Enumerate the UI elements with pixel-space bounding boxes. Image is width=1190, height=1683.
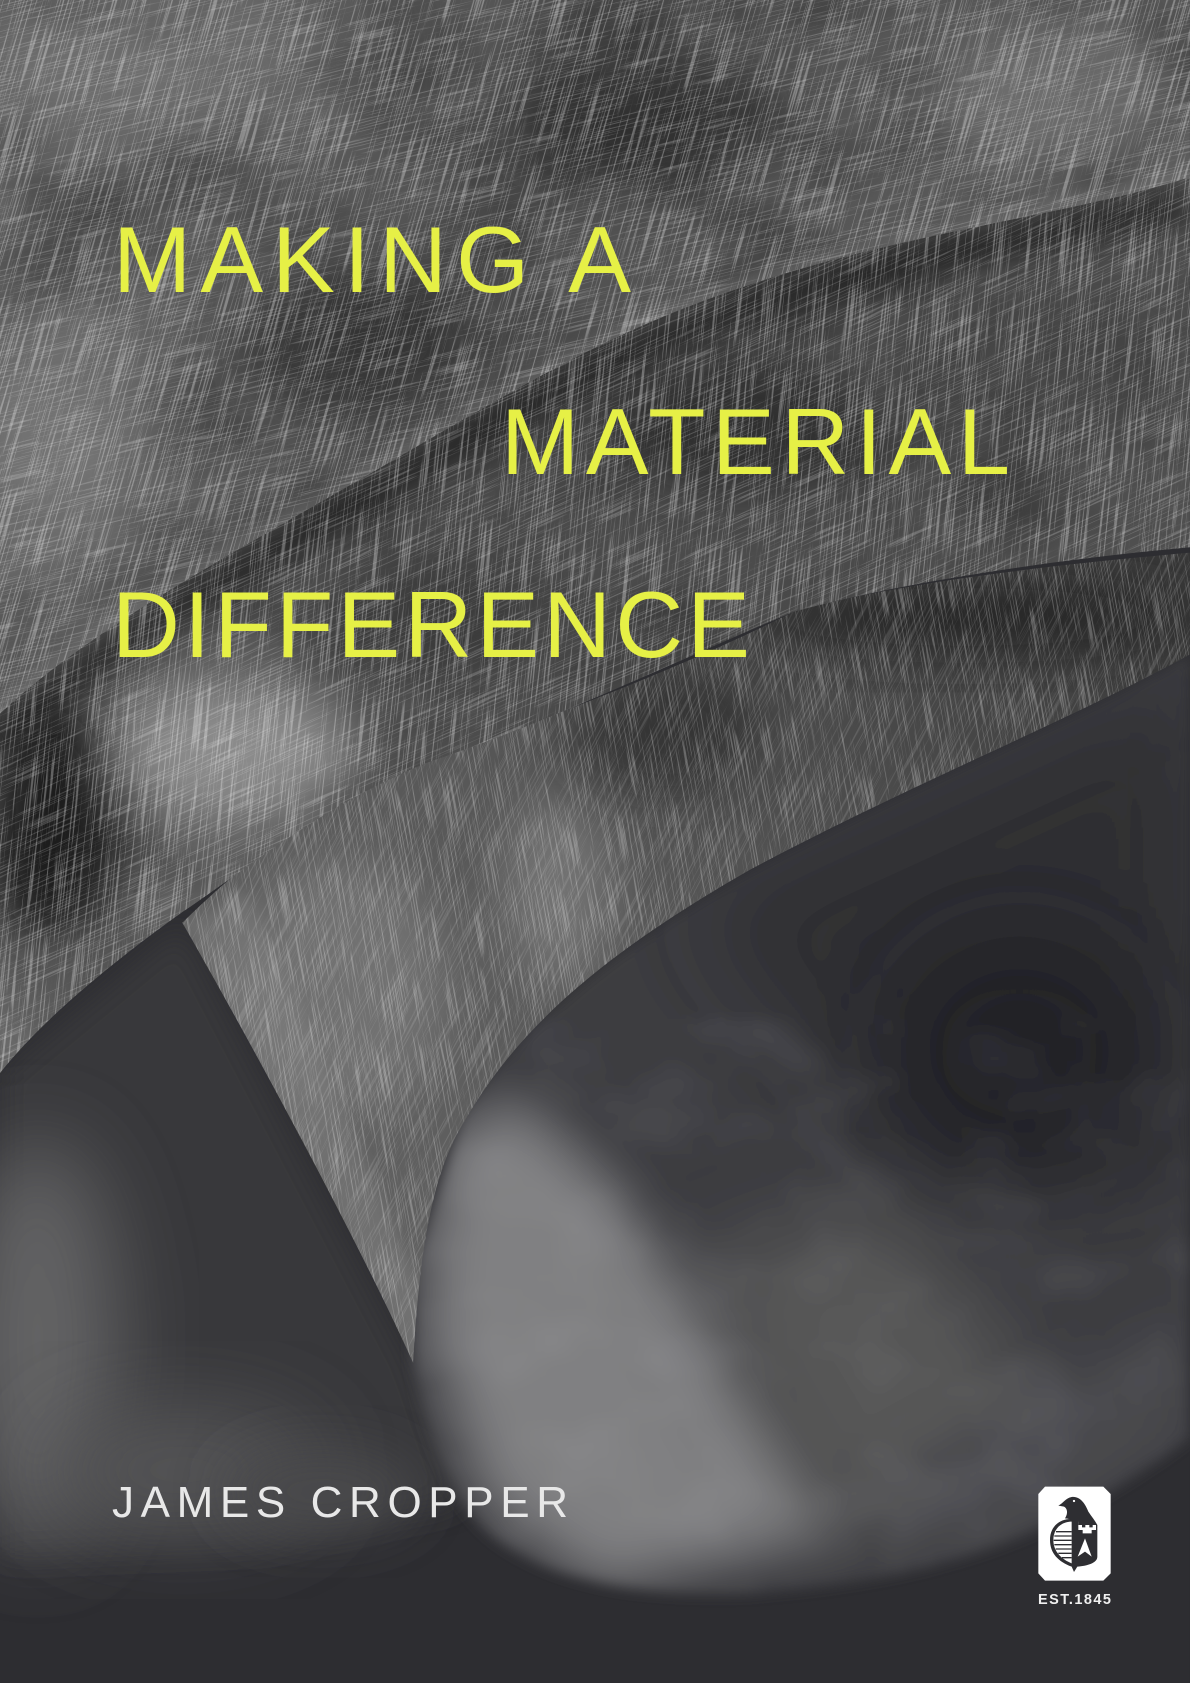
top sheet <box>0 0 1190 730</box>
logo caption: EST.1845 <box>1038 1592 1111 1608</box>
logo: James Cropper crest <box>1038 1487 1111 1608</box>
blurred rear sheet at left <box>0 923 461 1556</box>
blurred curved interior with light band <box>408 644 1190 1609</box>
middle sheet <box>0 161 1190 1073</box>
author name: JAMES CROPPER <box>112 1478 568 1527</box>
lower sheet and vertical band <box>161 536 1190 1395</box>
title line: MAKING A: MAKING A <box>113 207 631 312</box>
title line: DIFFERENCE: DIFFERENCE <box>112 572 750 677</box>
logo badge <box>1038 1487 1111 1581</box>
title <box>112 207 1010 677</box>
title line: MATERIAL: MATERIAL <box>501 389 1010 494</box>
